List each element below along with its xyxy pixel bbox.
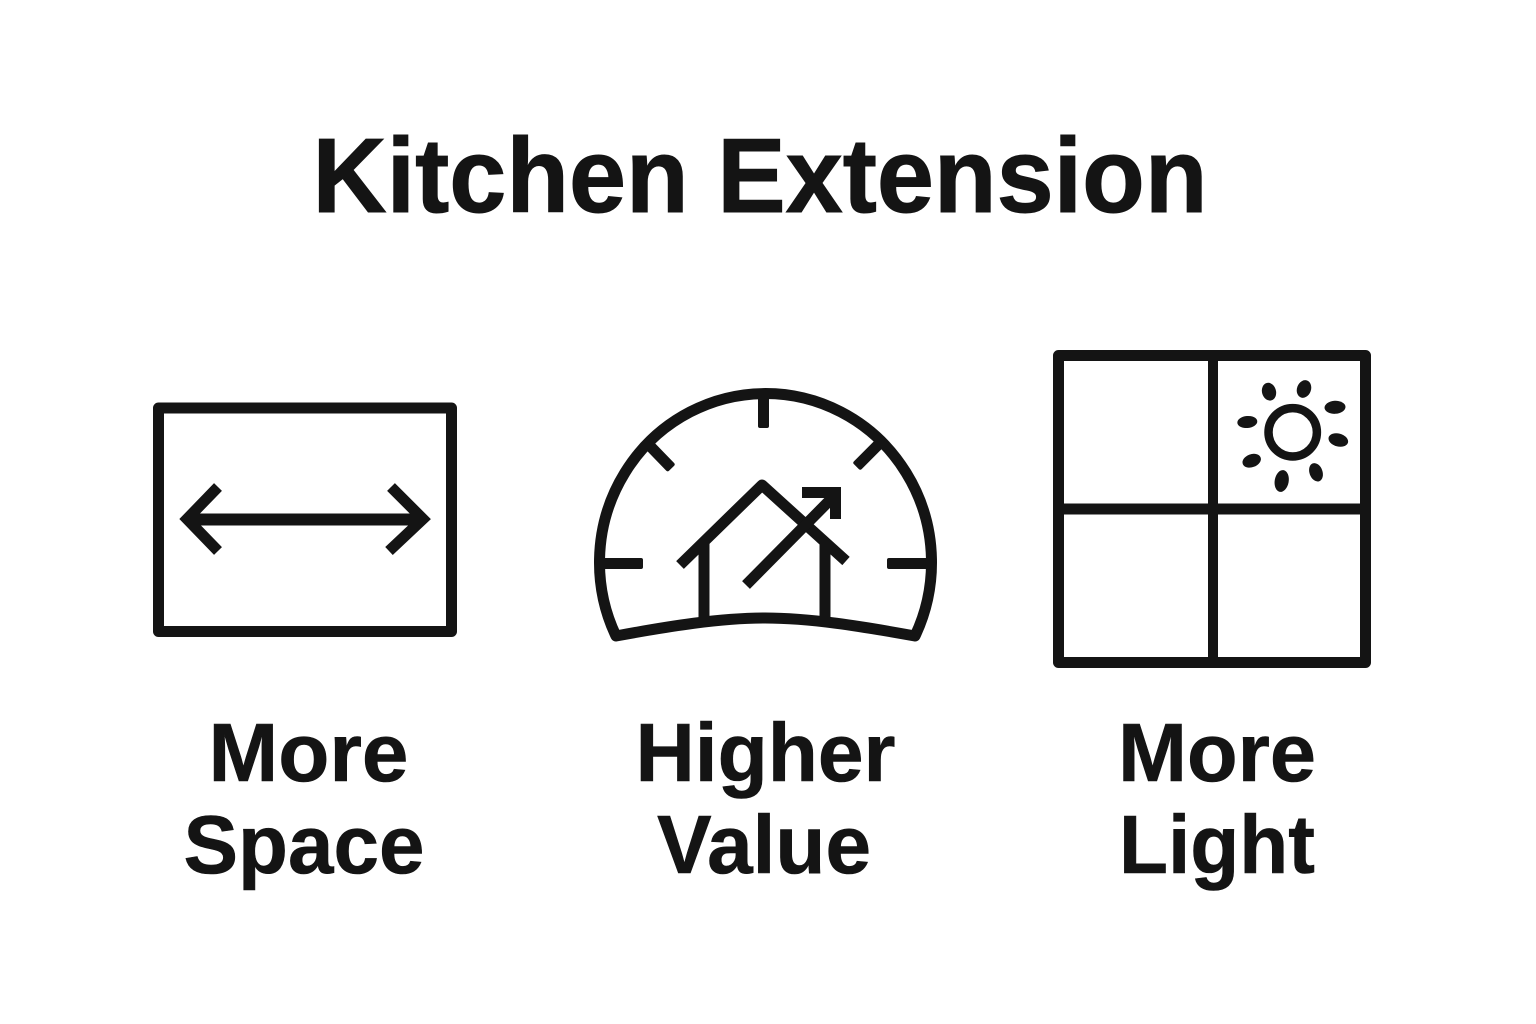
label: more space (184, 706, 424, 891)
title: Kitchen Extension (312, 117, 1208, 235)
label: more light: More (1118, 706, 1316, 799)
label: higher value: Value (657, 798, 871, 891)
icon: more space, box with double arrow (158, 408, 452, 632)
label: more space: Space (184, 798, 424, 891)
label: higher value: Higher (636, 706, 896, 799)
icon: more light, window with sun (1058, 355, 1366, 663)
label: more space: More (208, 706, 408, 799)
icon: higher value, gauge with house (599, 394, 932, 636)
label: higher value (636, 706, 896, 891)
label: more light: Light (1119, 798, 1315, 891)
label: more light (1118, 706, 1316, 891)
